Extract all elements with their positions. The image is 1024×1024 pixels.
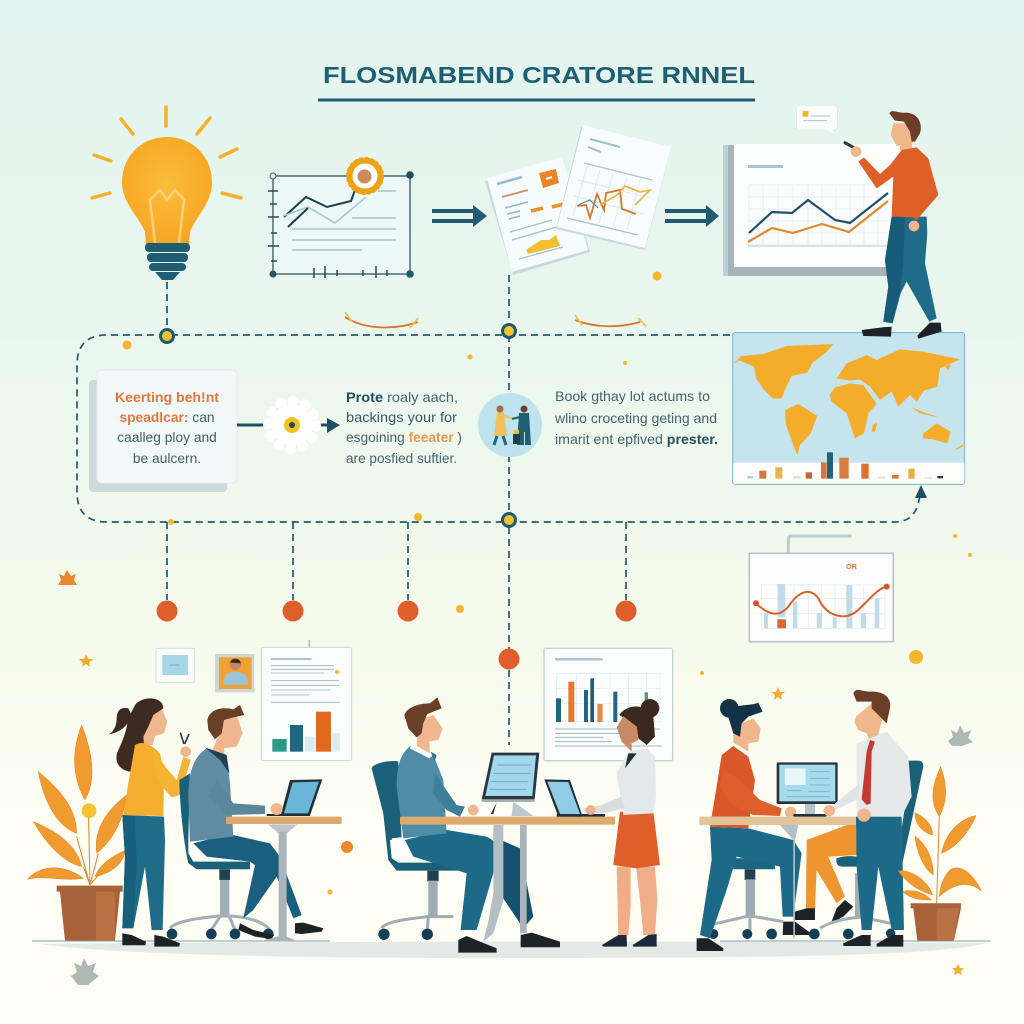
text block: right	[554, 388, 718, 447]
note card: Keerting beh!nt	[115, 390, 219, 405]
bottom right chart	[749, 536, 893, 642]
picture: portrait	[215, 654, 254, 692]
chart: first process report	[268, 158, 414, 278]
person: seated man with monitor	[372, 697, 533, 953]
note card: caalleg ploy and	[117, 430, 217, 445]
world map panel	[733, 333, 965, 484]
bottom right chart: OR	[846, 562, 858, 571]
text block: middle: are posfied suftier.	[346, 450, 457, 466]
center desk and monitor	[400, 753, 615, 947]
text block: right: Book gthay lot actums to	[555, 388, 710, 404]
documents	[485, 125, 671, 275]
text block: middle: esgoining feeater )	[346, 429, 462, 445]
wall panels left	[156, 640, 352, 761]
board with line chart	[723, 144, 904, 276]
floor	[32, 941, 990, 958]
connector nodes	[160, 324, 516, 526]
report with bars	[261, 640, 352, 761]
person: standing woman with laptop	[544, 699, 660, 947]
desk: left	[226, 817, 342, 942]
text block: middle	[346, 389, 462, 466]
icon: light bulb	[92, 107, 241, 280]
text block: right: wlino croceting geting and	[554, 410, 717, 426]
arrowhead into map	[915, 485, 927, 498]
plant: left	[27, 725, 127, 941]
text block: middle: Prote roaly aach,	[346, 389, 458, 405]
presenter	[797, 105, 942, 339]
icon: flower gear with arrow	[237, 401, 340, 450]
decorative stars and dots	[58, 272, 973, 985]
wall panel: bar chart	[544, 648, 673, 761]
person: woman in orange on stool	[697, 699, 810, 951]
title	[318, 62, 755, 102]
note card: be aulcern.	[133, 451, 201, 466]
person: seated man with laptop	[167, 705, 323, 939]
map mini bars	[747, 452, 943, 479]
note card: speadlcar: can	[119, 410, 215, 425]
title: FLOSMABEND CRATORE RNNEL	[323, 62, 755, 88]
icon: two people handshake	[478, 393, 542, 457]
speech bubble	[797, 105, 837, 135]
connector: dashed flow loop	[77, 275, 921, 745]
orange milestone dots	[156, 600, 636, 670]
plant: right	[898, 767, 982, 941]
curved accents above loop	[345, 312, 646, 328]
arrow: chart to documents	[432, 205, 487, 227]
picture: envelope	[156, 648, 195, 682]
text block: right: imarit ent epfived prester.	[555, 431, 718, 447]
continents	[733, 344, 963, 455]
desk: right with monitor	[699, 762, 884, 938]
arrow: documents to board	[665, 205, 719, 227]
note card	[89, 370, 237, 492]
person: woman in yellow standing	[108, 698, 191, 947]
person: standing man with tie	[809, 690, 923, 947]
text block: middle: backings your for	[346, 409, 457, 425]
